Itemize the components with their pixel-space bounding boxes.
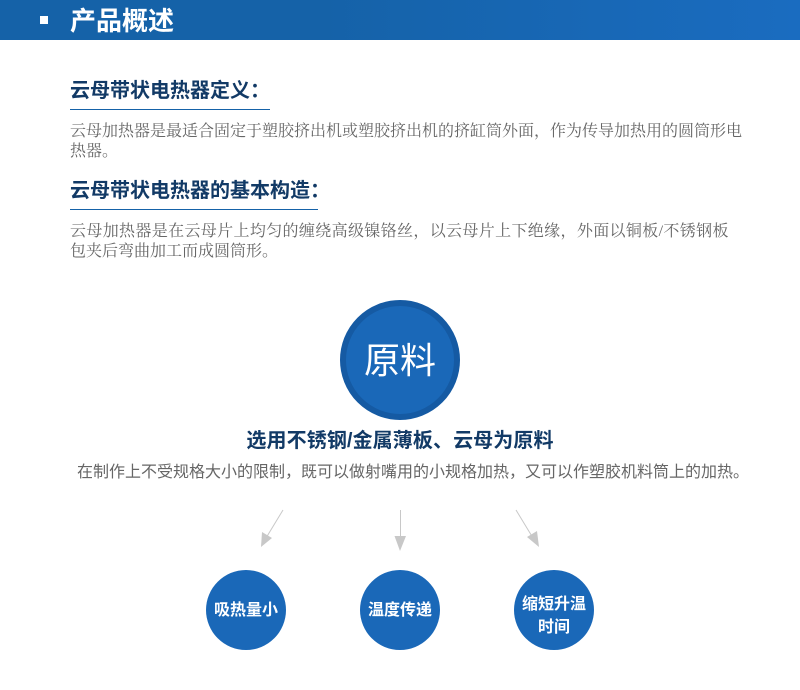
main circle: raw material: 原料 <box>364 340 436 381</box>
text: structure <box>70 222 729 260</box>
text: definition <box>70 122 742 160</box>
header bullet <box>40 16 48 24</box>
description: 在制作上不受规格大小的限制，既可以做射嘴用的小规格加热，又可以作塑胶机料筒上的加热。 <box>77 464 749 481</box>
circle: temperature transfer: 温度传递 <box>368 602 432 619</box>
arrow: left <box>261 510 283 547</box>
circle: short heating time: 缩短升温 <box>522 596 586 613</box>
text: definition: 云母加热器是最适合固定于塑胶挤出机或塑胶挤出机的挤缸筒外面，作为传导加热用的圆筒形电 <box>70 123 742 140</box>
heading: structure: 云母带状电热器的基本构造： <box>70 180 330 202</box>
main circle: raw material <box>340 300 460 420</box>
arrow: right <box>516 510 539 547</box>
heading: structure <box>70 179 318 210</box>
circle: short heating time: 时间 <box>538 619 570 636</box>
circle: low heat absorption <box>206 570 286 650</box>
arrow: middle <box>394 510 406 551</box>
header bar <box>0 0 800 40</box>
header title: 产品概述 <box>70 6 174 36</box>
text: structure: 云母加热器是在云母片上均匀的缠绕高级镍铬丝，以云母片上下绝缘，外面以铜板/不锈钢板 <box>70 223 729 240</box>
text: structure: 包夹后弯曲加工而成圆筒形。 <box>70 243 278 260</box>
subheading: materials: 选用不锈钢/金属薄板、云母为原料 <box>246 430 554 452</box>
heading: definition: 云母带状电热器定义： <box>70 80 270 102</box>
circle: temperature transfer <box>360 570 440 650</box>
circle: short heating time <box>514 570 594 650</box>
arrows <box>261 510 539 551</box>
text: definition: 热器。 <box>70 143 118 160</box>
circle: low heat absorption: 吸热量小 <box>214 602 278 619</box>
